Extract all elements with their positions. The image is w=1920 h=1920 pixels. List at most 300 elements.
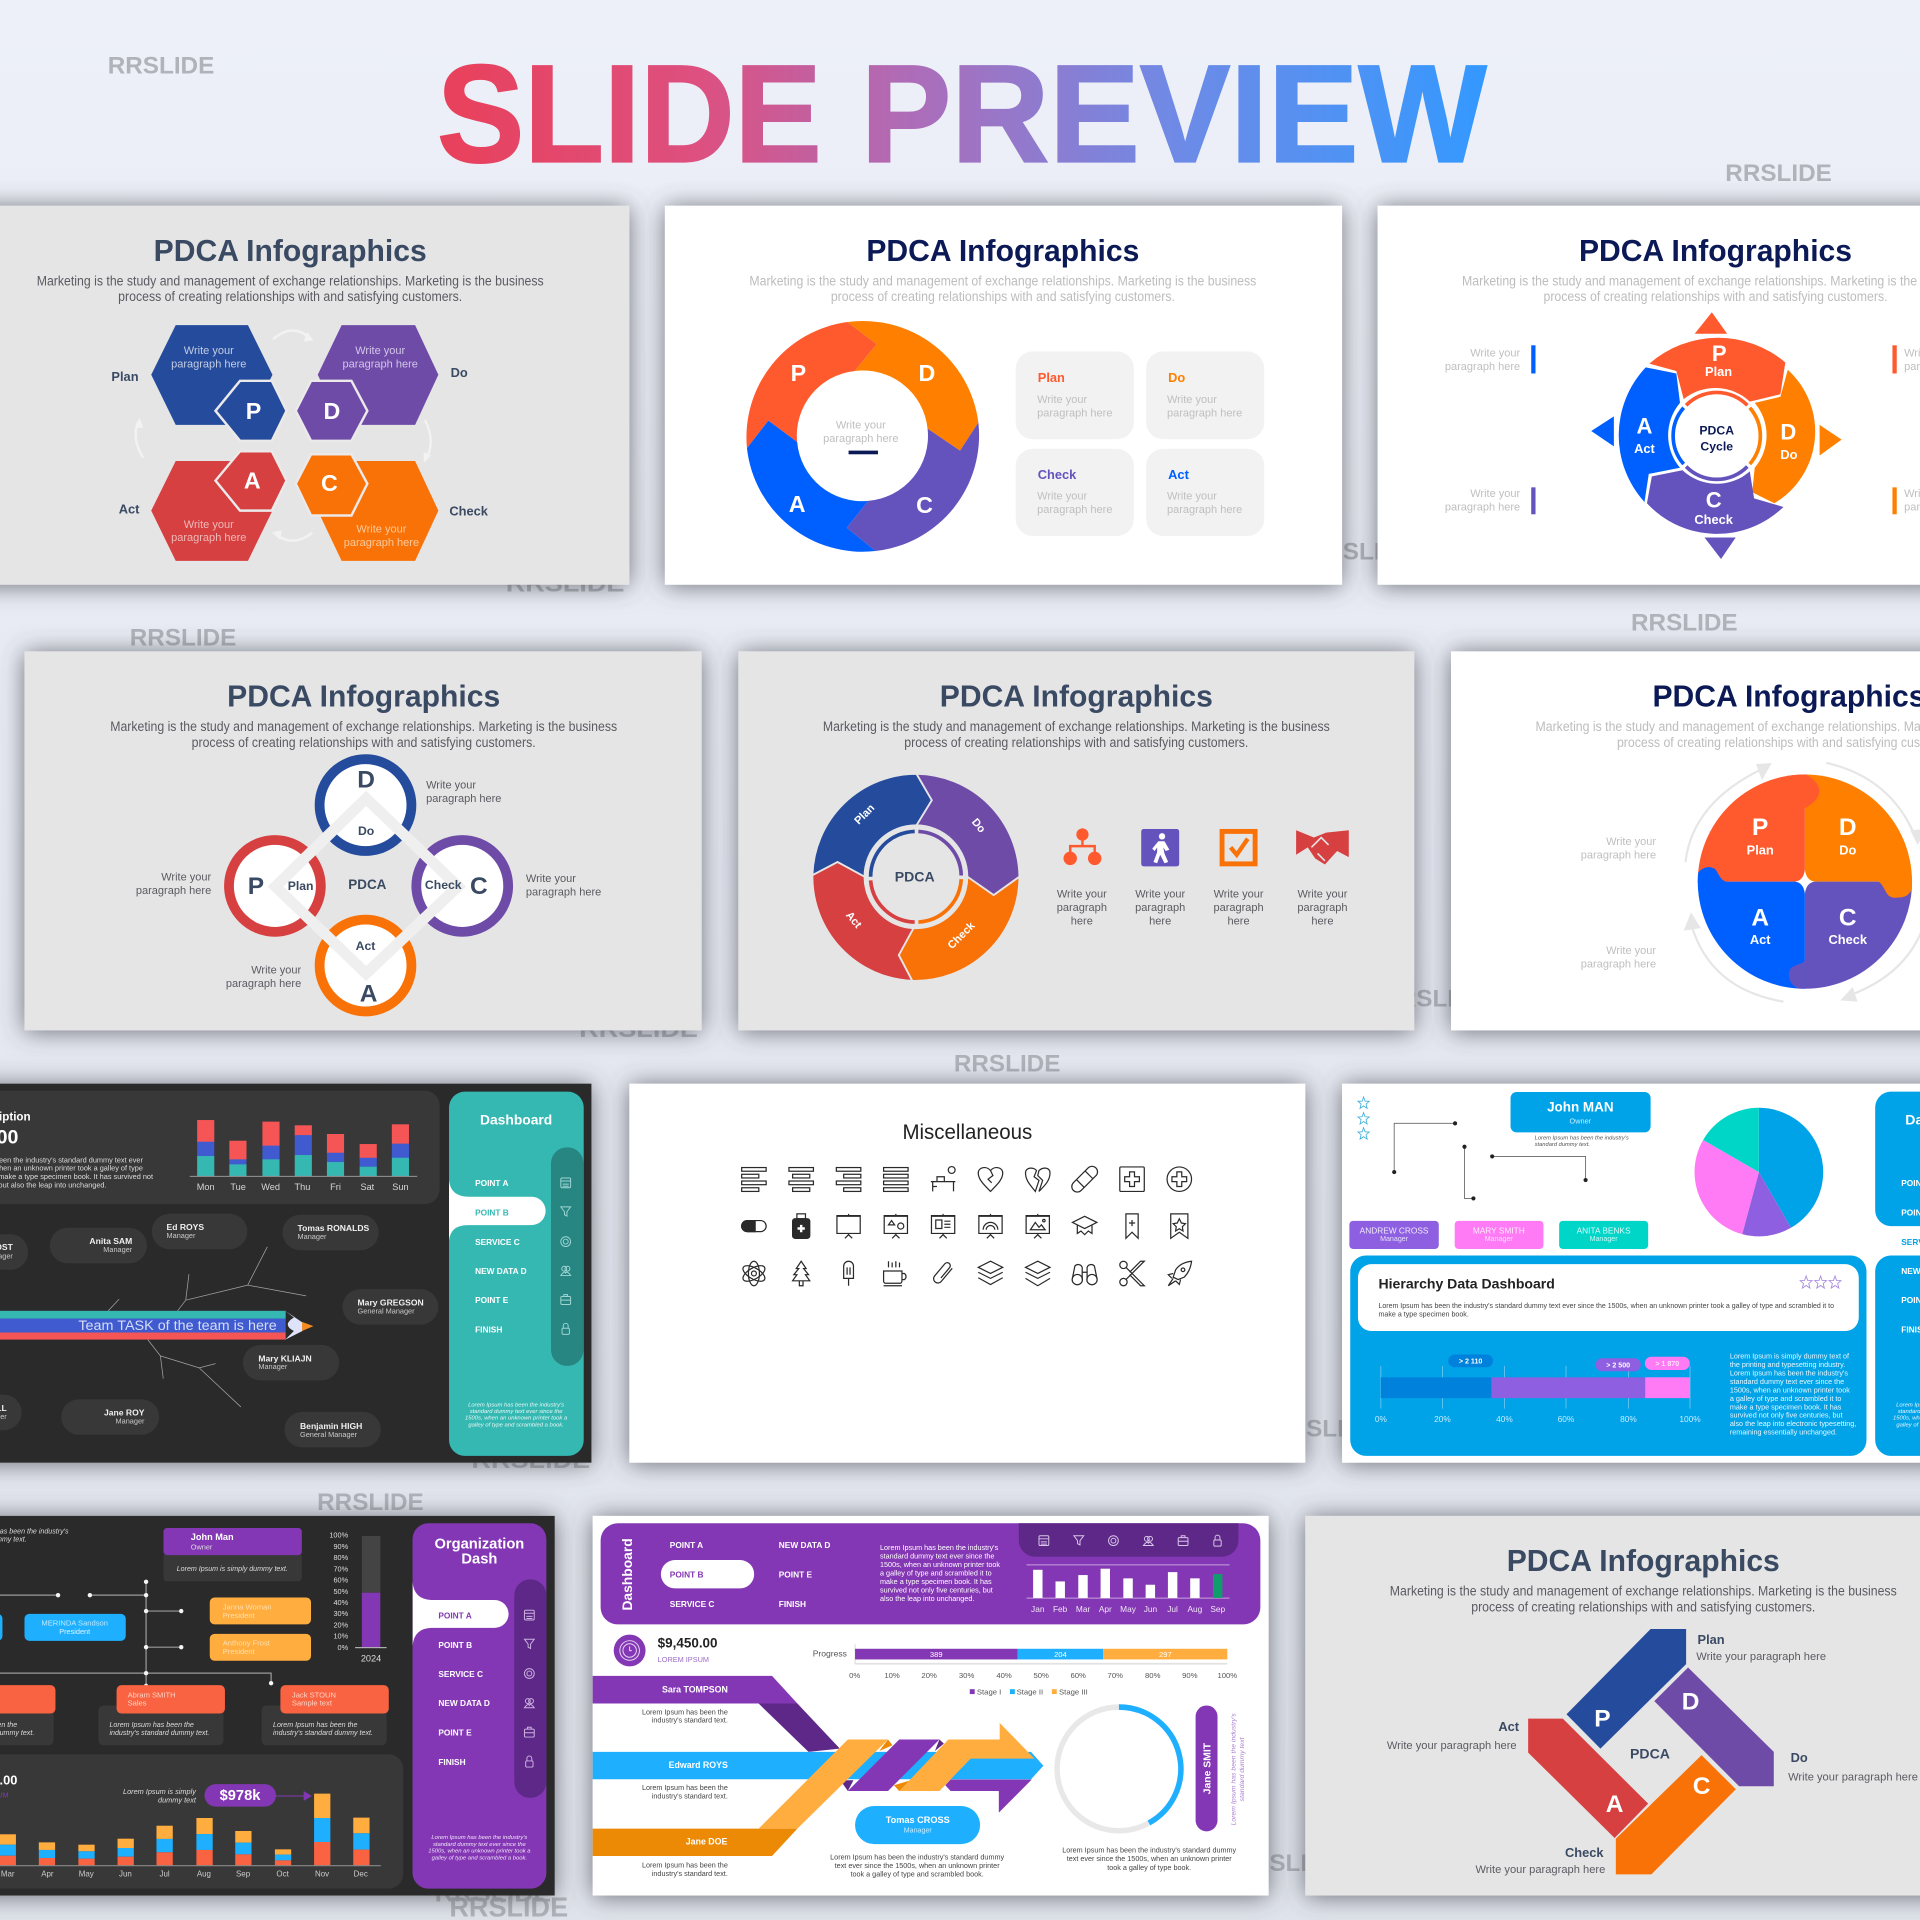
person pills: General Manager	[358, 1307, 415, 1316]
staff boxes: industry's standard dummy text.	[109, 1729, 209, 1737]
person pills: Anita SAM	[89, 1236, 132, 1246]
labels: Write your paragraph here	[1387, 1740, 1517, 1752]
icon captions: Write your	[1214, 889, 1264, 901]
icon captions: Write your	[1057, 889, 1107, 901]
icon: screen shapes	[884, 1214, 908, 1238]
sidebar: Dashboard teal: POINT A	[475, 1178, 509, 1188]
header bar: May	[1120, 1604, 1137, 1614]
ribbon arrows: Jane DOE	[686, 1836, 727, 1846]
manager boxes: Manager	[1485, 1235, 1513, 1243]
owner box: John MAN	[1547, 1099, 1614, 1114]
manager boxes	[1349, 1221, 1648, 1249]
progress chart: 0%	[849, 1671, 860, 1680]
header bar: SERVICE C	[670, 1599, 714, 1609]
puzzle circle: C	[1839, 905, 1857, 932]
labels: Plan	[111, 369, 139, 384]
president boxes: MERINDA Sandson	[41, 1619, 108, 1628]
description: Marketing is the study and management of exchange relationships. Marketing is the business	[823, 719, 1330, 734]
cycle diagram: A	[1637, 413, 1653, 438]
pie chart	[1695, 1108, 1823, 1236]
monthly stacked chart panel: dummy text	[158, 1795, 197, 1804]
card: Do: Do	[1168, 370, 1185, 385]
stacked bar: 100%	[1679, 1414, 1701, 1424]
description: process of creating relationships with and satisfying customers.	[1543, 289, 1888, 304]
description: process of creating relationships with and satisfying customers.	[118, 289, 462, 304]
person pills: Ed ROYS	[167, 1222, 204, 1232]
puzzle circle: Do	[1839, 843, 1856, 858]
progress chart: 30%	[959, 1671, 974, 1680]
puzzle circle: P	[1752, 814, 1768, 841]
connectors	[1392, 1121, 1588, 1200]
blue data panel: Lorem Ipsum is simply dummy text of	[1730, 1352, 1850, 1361]
card: Check	[1016, 449, 1134, 536]
cycle diagram: P	[1712, 341, 1727, 366]
side notes: paragraph here	[1445, 361, 1520, 373]
person pills: Manager	[116, 1417, 145, 1426]
labels: Write your paragraph here	[1696, 1651, 1826, 1663]
manager pill: Tomas CROSS	[886, 1815, 950, 1825]
sidebar: Dashboard teal: Dashboard	[480, 1111, 552, 1127]
description: process of creating relationships with and satisfying customers.	[831, 289, 1175, 304]
sidebar: Organization Dash	[413, 1523, 546, 1889]
notes: Write your	[1606, 945, 1656, 957]
icon: popsicle	[844, 1261, 853, 1286]
panel: slide 4 circles	[24, 651, 702, 1030]
column chart 2024: 50%	[333, 1587, 349, 1596]
blue data panel: Lorem Ipsum has been the industry's standard dummy text ever since the 1500s, when an unknown printer took a galley of type and scrambled it to	[1379, 1302, 1834, 1310]
circles and diamond: C	[470, 873, 488, 900]
monthly stacked chart panel: $978k	[220, 1788, 261, 1804]
hexagon Check	[296, 454, 438, 561]
circles and diamond: A	[360, 981, 378, 1008]
icon: align right	[836, 1168, 861, 1191]
icon captions: here	[1149, 915, 1171, 927]
icon captions: paragraph	[1297, 902, 1348, 914]
panel: slide 12 diamond	[1305, 1516, 1920, 1896]
circles and diamond: Act	[356, 939, 375, 953]
cycle diagram: Do	[1780, 447, 1798, 462]
progress chart: 70%	[1108, 1671, 1123, 1680]
diamond diagram	[1528, 1629, 1774, 1874]
icon: paperclip	[932, 1261, 953, 1285]
progress chart	[813, 1644, 1237, 1697]
watermarks: RRSLIDE	[954, 1050, 1060, 1077]
pencil arrow: team task: Team TASK of the team is here	[78, 1317, 277, 1333]
description: Marketing is the study and management of exchange relationships. Marketing is the business	[110, 719, 617, 734]
sidebar: Dashboard teal: galley of type and scrambled a book.	[468, 1422, 564, 1428]
notes: Write your	[161, 871, 212, 883]
progress chart: Stage I	[977, 1688, 1001, 1697]
notes: paragraph here	[526, 887, 601, 899]
panel: slide 8 miscellaneous icons	[629, 1084, 1305, 1463]
side notes: Write your	[1470, 488, 1521, 500]
icon: projector screen	[836, 1214, 861, 1238]
staff boxes	[0, 1685, 389, 1745]
ring chart: Plan	[852, 802, 877, 827]
panel: slide 6 puzzle	[1451, 651, 1920, 1030]
owner box: John Man	[191, 1532, 234, 1542]
vertical name pill	[1196, 1705, 1246, 1831]
stacked bar chart: Sat	[360, 1182, 375, 1192]
blue data panel: a galley of type and scrambled it to	[1730, 1394, 1841, 1403]
icon: graduation cap	[1072, 1216, 1097, 1235]
heading: PDCA Infographics	[866, 234, 1139, 268]
description	[1536, 719, 1920, 750]
diamond diagram: P	[1594, 1706, 1611, 1733]
progress chart: Progress	[813, 1649, 847, 1659]
puzzle circle: Act	[1750, 932, 1771, 947]
stacked bar chart: Fri	[330, 1182, 341, 1192]
progress chart: 297	[1159, 1650, 1172, 1659]
president boxes	[0, 1597, 311, 1661]
stacked bar chart: Thu	[295, 1182, 310, 1192]
sidebar: Dashboard teal: POINT E	[475, 1295, 509, 1305]
sidebar: Organization Dash: SERVICE C	[438, 1669, 483, 1679]
person pills: Manager	[298, 1232, 327, 1241]
blue data panel	[1350, 1255, 1866, 1456]
ribbon arrows: Lorem Ipsum has been the	[642, 1860, 728, 1869]
column chart 2024: 2024	[361, 1654, 381, 1664]
panel: slide 1 hexagons	[0, 206, 629, 585]
cycle diagram: D	[1780, 420, 1796, 445]
progress chart: 60%	[1070, 1671, 1086, 1680]
sidebar: Organization Dash: NEW DATA D	[438, 1698, 490, 1708]
monthly stacked chart panel: May	[79, 1870, 94, 1879]
stacked bar: 20%	[1434, 1414, 1451, 1424]
staff boxes: Lorem Ipsum has been the	[109, 1721, 194, 1729]
title	[437, 37, 1487, 192]
header bar: Dashboard	[619, 1538, 635, 1611]
manager boxes: Manager	[1590, 1235, 1618, 1243]
watermarks: RRSLIDE	[130, 624, 236, 651]
side notes	[1445, 345, 1920, 514]
circles and diamond: Check	[425, 878, 462, 892]
header bar: Mar	[1076, 1604, 1090, 1614]
title: SLIDE	[437, 37, 822, 192]
staff boxes: Jack STOUN	[292, 1691, 336, 1700]
arrows	[1591, 312, 1842, 559]
sidebar: Organization Dash: standard dummy text ever since the	[433, 1842, 527, 1848]
manager boxes: ANITA BENKS	[1577, 1225, 1631, 1235]
owner box: Lorem Ipsum has been the industry's	[1535, 1135, 1629, 1141]
icon: handshake	[1296, 830, 1349, 864]
progress chart: 389	[930, 1650, 943, 1659]
manager boxes: ANDREW CROSS	[1360, 1225, 1429, 1235]
diamond diagram: D	[1682, 1688, 1699, 1715]
icon: desk	[931, 1167, 955, 1191]
notes: paragraph here	[136, 885, 211, 897]
person pills: General Manager	[300, 1430, 358, 1439]
president boxes: Janna Woman	[223, 1602, 271, 1611]
manager pill: took a galley of type and scrambled book.	[851, 1870, 984, 1879]
sidebar: Organization Dash: POINT E	[438, 1728, 472, 1738]
staff boxes: Abram SMITH	[128, 1691, 176, 1700]
header bar: Aug	[1187, 1604, 1203, 1614]
watermarks: RRSLIDE	[506, 570, 624, 597]
sidebar: Dashboard teal: FINISH	[475, 1324, 502, 1334]
person pills: Jane ROY	[104, 1408, 145, 1418]
notes	[1581, 836, 1656, 970]
progress chart: 80%	[1145, 1671, 1161, 1680]
hexagon Do: paragraph here	[343, 358, 418, 370]
ribbon arrows: Sara TOMPSON	[662, 1684, 728, 1694]
panel: slide 3 cycle	[1378, 206, 1920, 585]
ring chart: paragraph here	[823, 433, 898, 445]
blue data panel: make a type specimen book.	[1379, 1311, 1469, 1319]
staff boxes: Lorem Ipsum has been the	[273, 1721, 358, 1729]
hexagon Check: Write your	[356, 524, 407, 536]
column chart 2024: 30%	[333, 1609, 349, 1618]
manager boxes: MARY SMITH	[1473, 1225, 1525, 1235]
notes: paragraph here	[1581, 849, 1656, 861]
notes: paragraph here	[1581, 958, 1656, 970]
icon: cracked heart	[978, 1168, 1003, 1191]
labels: Act	[1498, 1719, 1520, 1734]
hexagon Do: D	[323, 398, 340, 424]
person pills: Manager	[103, 1245, 133, 1254]
card: Check: Check	[1038, 467, 1077, 482]
header bar: Jan	[1031, 1604, 1045, 1614]
icon captions: here	[1311, 915, 1333, 927]
diamond diagram: C	[1693, 1773, 1710, 1800]
icon captions: paragraph	[1213, 902, 1264, 914]
owner box: standard dummy text.	[1535, 1142, 1590, 1148]
panel: slide 7 dark fishbone dashboard	[0, 1084, 591, 1463]
icon captions: Write your	[1297, 889, 1348, 901]
notes: Write your	[251, 964, 302, 976]
manager pill	[830, 1806, 1004, 1879]
ribbon arrows: Lorem Ipsum has been the	[642, 1707, 728, 1716]
monthly stacked chart panel: Lorem Ipsum is simply	[123, 1787, 197, 1796]
ring chart: C	[916, 492, 933, 518]
blue data panel: survived not only five centuries, but	[1730, 1411, 1843, 1420]
ring chart: Check	[946, 919, 978, 952]
labels: Write your paragraph here	[1788, 1771, 1918, 1783]
column chart 2024: 0%	[338, 1643, 349, 1652]
sidebar: Dashboard blue	[1875, 1092, 1920, 1456]
labels: Check	[449, 504, 489, 519]
cycle diagram: Act	[1634, 441, 1656, 456]
fishbone lines	[108, 1247, 306, 1407]
card: Do: Write your	[1167, 394, 1217, 406]
icon: tree	[793, 1261, 810, 1286]
monthly stacked chart panel: Sep	[236, 1870, 251, 1879]
ring chart	[746, 321, 979, 552]
circles and diamond: Do	[358, 824, 374, 838]
header bar: a galley of type and scrambled it to	[880, 1568, 992, 1577]
president boxes: President	[223, 1647, 256, 1656]
column chart 2024: 10%	[333, 1632, 349, 1641]
description	[823, 719, 1330, 750]
icon captions	[1057, 889, 1348, 927]
card: Plan: Write your	[1037, 394, 1087, 406]
ring chart: Act	[843, 909, 864, 931]
description: process of creating relationships with and satisfying customers.	[1471, 1599, 1815, 1614]
icon: clock with amount: LOREM IPSUM	[658, 1655, 709, 1664]
ring chart: Do	[969, 816, 988, 836]
column chart 2024: 100%	[329, 1531, 349, 1540]
column chart 2024	[329, 1531, 387, 1664]
header bar: standard dummy text ever since the	[880, 1552, 994, 1561]
president boxes: President	[59, 1627, 90, 1636]
person pills: Benjamin HIGH	[300, 1421, 362, 1431]
monthly stacked chart panel: Jun	[119, 1870, 132, 1879]
blue data panel: 1500s, when an unknown printer took	[1730, 1385, 1850, 1394]
description: process of creating relationships with and satisfying customers.	[192, 735, 536, 750]
sidebar: Dashboard teal: POINT B	[475, 1207, 509, 1217]
hexagon Check: paragraph here	[344, 537, 419, 549]
card: Plan	[1016, 351, 1134, 439]
column chart 2024: 90%	[333, 1542, 349, 1551]
cycle diagram: Cycle	[1700, 440, 1733, 454]
blue data panel: also the leap into electronic typesetting,	[1730, 1419, 1856, 1428]
manager pill: text ever since the 1500s, when an unknown printer	[835, 1861, 1000, 1870]
donut chart: took a galley of type book.	[1107, 1863, 1191, 1872]
progress chart: 100%	[1217, 1671, 1237, 1680]
circles and diamond: PDCA	[348, 877, 387, 892]
icon: broken heart	[1026, 1168, 1050, 1191]
circles and diamond: D	[357, 766, 375, 793]
icon: align left	[742, 1168, 766, 1191]
blue data panel: Hierarchy Data Dashboard	[1379, 1277, 1555, 1292]
card: Plan: Plan	[1038, 370, 1065, 385]
donut chart: Lorem Ipsum has been the industry's standard dummy	[1062, 1846, 1237, 1855]
icon: clock with amount	[614, 1635, 718, 1666]
sidebar: Dashboard teal: NEW DATA D	[475, 1266, 527, 1276]
column chart 2024: 80%	[333, 1553, 349, 1562]
sidebar: Dashboard teal: SERVICE C	[475, 1237, 520, 1247]
header bar: Jul	[1167, 1604, 1178, 1614]
stacked bar: 60%	[1558, 1414, 1575, 1424]
ribbon arrows: Edward ROYS	[669, 1760, 728, 1770]
puzzle circle: A	[1751, 905, 1769, 932]
owner box	[163, 1528, 302, 1581]
sidebar: Organization Dash: Lorem Ipsum has been the industry's	[431, 1835, 527, 1841]
stacked bar chart: Sun	[392, 1182, 409, 1192]
hexagon Act: Write your	[184, 519, 234, 531]
icon: rocket	[1168, 1261, 1192, 1286]
progress chart: 50%	[1033, 1671, 1049, 1680]
ribbon arrows: industry's standard text.	[652, 1715, 728, 1724]
sidebar: Organization Dash: POINT B	[438, 1640, 472, 1650]
ring chart	[812, 774, 1019, 981]
card: Check: paragraph here	[1037, 504, 1112, 516]
monthly stacked chart panel: Mar	[1, 1870, 15, 1879]
heading: PDCA Infographics	[227, 680, 500, 714]
header bar: NEW DATA D	[779, 1540, 830, 1550]
puzzle circle: Plan	[1747, 843, 1774, 858]
labels: Check	[1565, 1845, 1604, 1860]
manager pill: Manager	[904, 1826, 932, 1834]
blue data panel: standard dummy text ever since the	[1730, 1377, 1844, 1386]
icon: screen rainbow	[978, 1214, 1003, 1238]
blue data panel: remaining essentially unchanged.	[1730, 1428, 1837, 1437]
person pills: Manager	[258, 1362, 288, 1371]
stacked bar: 80%	[1620, 1414, 1637, 1424]
hexagon Plan	[151, 325, 287, 441]
stacked bar	[1375, 1355, 1701, 1424]
intro text	[0, 1527, 69, 1544]
watermarks: RRSLIDE	[579, 1016, 698, 1043]
icon: toggle	[742, 1221, 766, 1232]
donut chart	[1057, 1707, 1237, 1872]
watermarks: RRSLIDE	[1271, 1415, 1378, 1442]
card: Act: Write your	[1167, 491, 1217, 503]
heading: PDCA Infographics	[1507, 1544, 1780, 1578]
person pills: Manager	[167, 1231, 196, 1240]
description	[110, 719, 617, 750]
staff boxes: Sales	[128, 1699, 147, 1708]
blue data panel: the printing and typesetting industry.	[1730, 1360, 1845, 1369]
sidebar: Dashboard teal: 1500s, when an unknown printer took a	[465, 1416, 568, 1422]
stacked bar chart: Tue	[230, 1182, 246, 1192]
icon captions: Write your	[1135, 889, 1186, 901]
column chart 2024: 70%	[333, 1564, 349, 1573]
cycle arrows	[1684, 763, 1920, 1002]
description	[1462, 273, 1920, 304]
hexagon Act: A	[244, 468, 261, 494]
watermarks: RRSLIDE	[317, 1489, 424, 1516]
hexagon Act	[151, 451, 287, 561]
monthly stacked chart panel: Jul	[159, 1870, 170, 1879]
icon: bookmark star	[1171, 1214, 1188, 1238]
stacked bar chart: Mon	[197, 1182, 215, 1192]
panel: slide 5 ring and icons	[738, 651, 1414, 1030]
header bar: Apr	[1099, 1604, 1112, 1614]
labels: Do	[451, 365, 468, 380]
watermarks: RRSLIDE	[108, 52, 214, 79]
vertical name pill: standard dummy text	[1239, 1736, 1246, 1801]
icon: align centre	[789, 1168, 813, 1191]
sidebar: Organization Dash: FINISH	[438, 1757, 466, 1767]
description	[1390, 1584, 1897, 1614]
card: Plan: paragraph here	[1037, 407, 1112, 419]
description	[37, 273, 544, 304]
owner box	[1511, 1092, 1651, 1148]
cycle diagram	[1619, 338, 1815, 534]
stacked bar: > 2 500	[1606, 1361, 1630, 1369]
notes: paragraph here	[426, 793, 501, 805]
monthly stacked chart panel: Nov	[315, 1870, 329, 1879]
card: Do	[1146, 351, 1264, 439]
card: Do: paragraph here	[1167, 407, 1242, 419]
labels: Write your paragraph here	[1476, 1864, 1605, 1876]
donut chart: text ever since the 1500s, when an unknown printer	[1067, 1854, 1232, 1863]
icon captions: paragraph	[1135, 902, 1185, 914]
sidebar: Dashboard teal	[449, 1092, 584, 1456]
monthly stacked chart panel: Apr	[41, 1870, 54, 1879]
notes: paragraph here	[226, 978, 301, 990]
manager pill: Lorem Ipsum has been the industry's standard dummy	[830, 1852, 1004, 1861]
header bar: also the leap into unchanged.	[880, 1594, 974, 1603]
ring chart: P	[791, 360, 806, 386]
description: Marketing is the study and management of exchange relationships. Marketing is the business	[37, 273, 544, 288]
stacked bar: 40%	[1496, 1414, 1513, 1424]
column chart 2024: 40%	[333, 1598, 349, 1607]
hexagon Plan: paragraph here	[171, 358, 246, 370]
monthly stacked chart panel: Dec	[354, 1870, 368, 1879]
header bar: Lorem Ipsum has been the industry's	[880, 1543, 999, 1552]
icon: medical document	[1120, 1167, 1144, 1191]
monthly stacked chart panel: Oct	[276, 1870, 290, 1879]
ribbon arrows: industry's standard text.	[652, 1869, 728, 1878]
ring chart: PDCA	[895, 869, 935, 885]
labels: Act	[119, 502, 140, 517]
heading: PDCA Infographics	[1579, 234, 1852, 268]
stacked bar: > 2 110	[1459, 1358, 1482, 1366]
vertical name pill: Jane SMIT	[1202, 1742, 1213, 1794]
heading: PDCA Infographics	[154, 234, 427, 268]
